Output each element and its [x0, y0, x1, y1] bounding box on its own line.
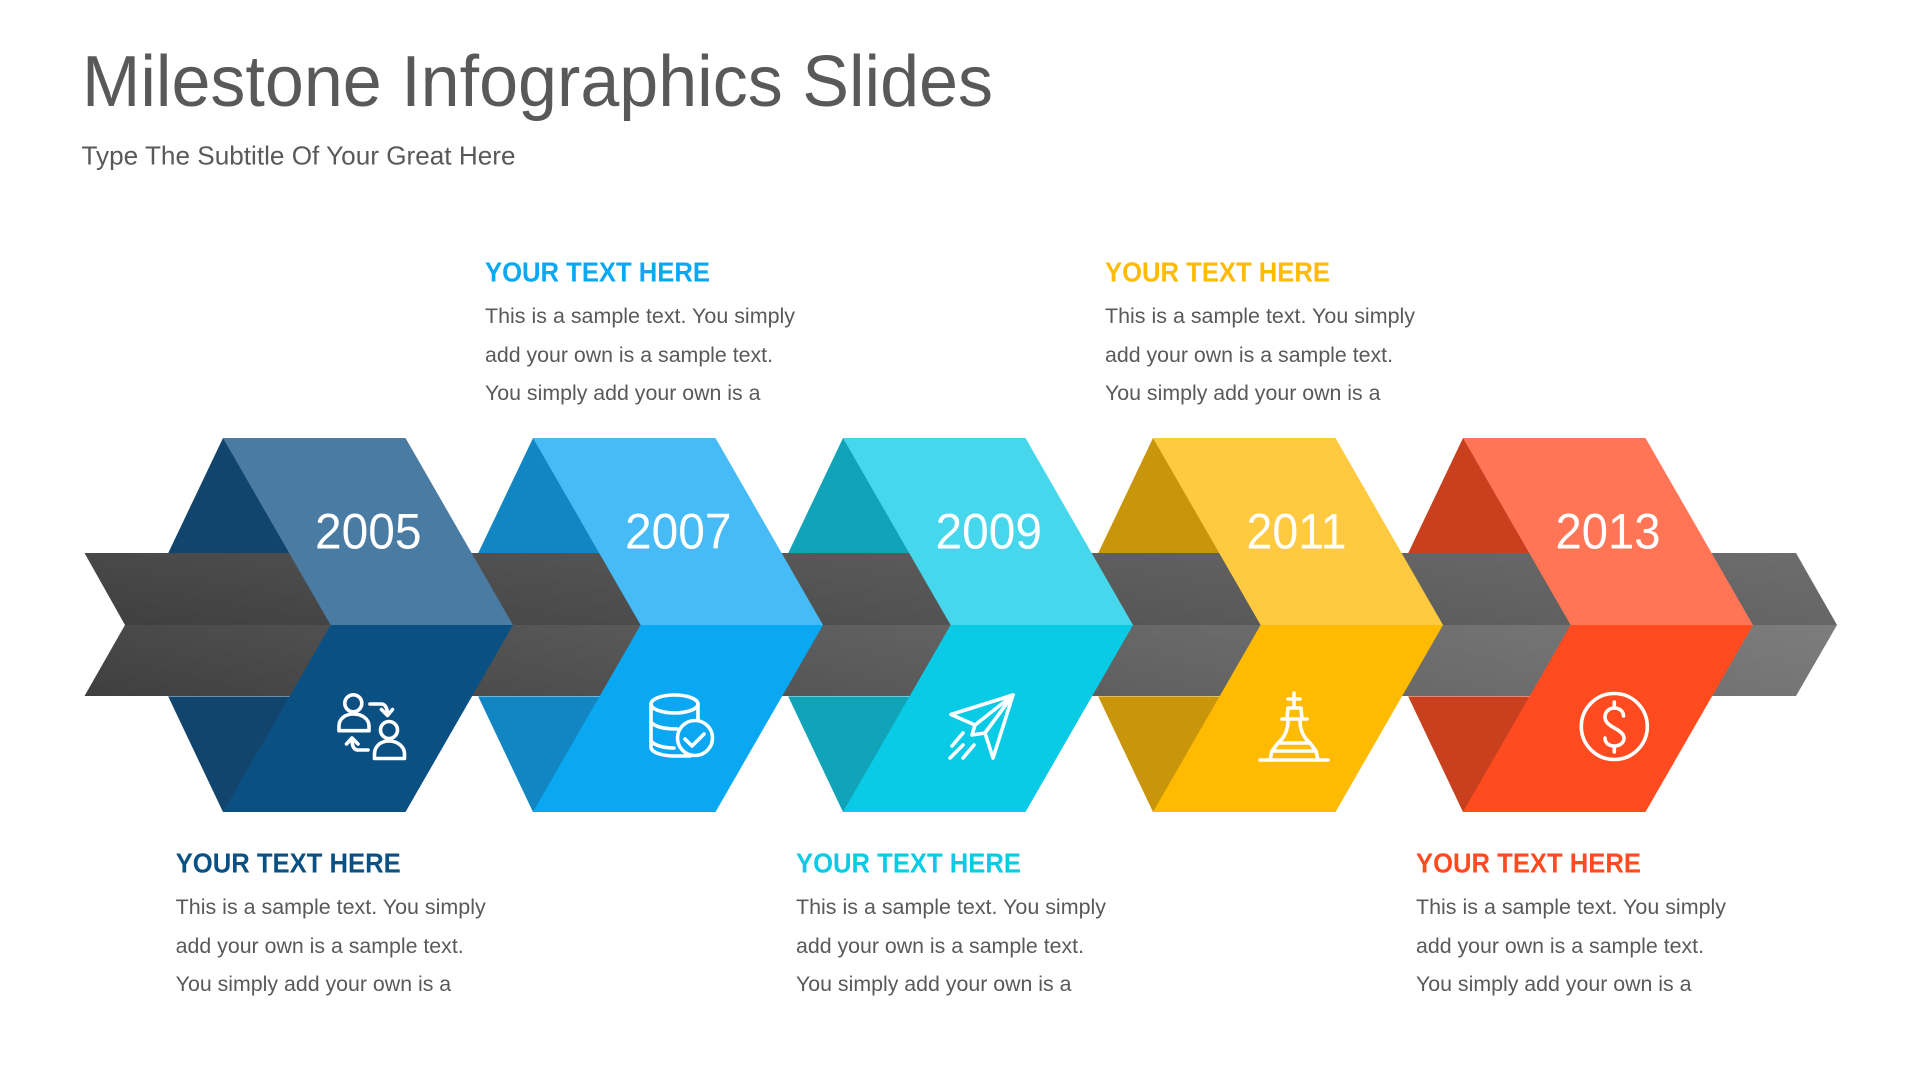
- text block: 2007: YOUR TEXT HERE: [485, 257, 710, 288]
- text block: 2007: add your own is a sample text.: [485, 344, 773, 367]
- icon: database check: [651, 695, 712, 756]
- icon: chess king: [1260, 693, 1328, 760]
- title: Milestone Infographics Slides: [82, 42, 993, 122]
- text block: 2007: This is a sample text. You simply: [485, 305, 796, 328]
- text block: 2011: YOUR TEXT HERE: [1105, 257, 1330, 288]
- text block: 2007: [485, 257, 796, 405]
- text block: 2009: This is a sample text. You simply: [796, 896, 1107, 919]
- milestone 2005: [223, 438, 513, 812]
- back triangles: [168, 438, 1540, 812]
- central arrow: [84, 553, 1837, 697]
- text block: 2009: YOUR TEXT HERE: [796, 848, 1021, 878]
- text block: 2013: YOUR TEXT HERE: [1416, 848, 1641, 878]
- text block: 2011: This is a sample text. You simply: [1105, 305, 1416, 328]
- text block: 2013: add your own is a sample text.: [1416, 935, 1704, 958]
- text block: 2011: [1105, 257, 1416, 405]
- year 2007: 2007: [625, 503, 732, 559]
- text block: 2005: This is a sample text. You simply: [176, 896, 486, 919]
- text block: 2009: You simply add your own is a: [796, 973, 1072, 996]
- milestone 2009: [843, 438, 1133, 812]
- text block: 2005: You simply add your own is a: [176, 973, 452, 996]
- text block: 2005: add your own is a sample text.: [176, 935, 464, 958]
- year 2011: 2011: [1246, 503, 1346, 559]
- year 2013: 2013: [1556, 503, 1660, 559]
- year 2005: 2005: [315, 503, 422, 559]
- icon: paper plane: [950, 695, 1013, 758]
- subtitle: Type The Subtitle Of Your Great Here: [82, 140, 516, 170]
- text block: 2013: [1416, 848, 1727, 996]
- text block: 2011: add your own is a sample text.: [1105, 344, 1393, 367]
- milestone 2013: [1463, 438, 1753, 812]
- text block: 2011: You simply add your own is a: [1105, 382, 1381, 405]
- text block: 2009: add your own is a sample text.: [796, 935, 1084, 958]
- text block: 2005: [176, 848, 486, 996]
- text block: 2013: This is a sample text. You simply: [1416, 896, 1727, 919]
- text block: 2005: YOUR TEXT HERE: [176, 848, 401, 878]
- icon: people exchange: [339, 695, 404, 758]
- text block: 2013: You simply add your own is a: [1416, 973, 1692, 996]
- milestone 2007: [533, 438, 823, 812]
- text block: 2009: [796, 848, 1107, 996]
- text block: 2007: You simply add your own is a: [485, 382, 761, 405]
- year 2009: 2009: [936, 503, 1042, 559]
- milestone 2011: [1153, 438, 1443, 812]
- icon: dollar coin: [1581, 694, 1647, 760]
